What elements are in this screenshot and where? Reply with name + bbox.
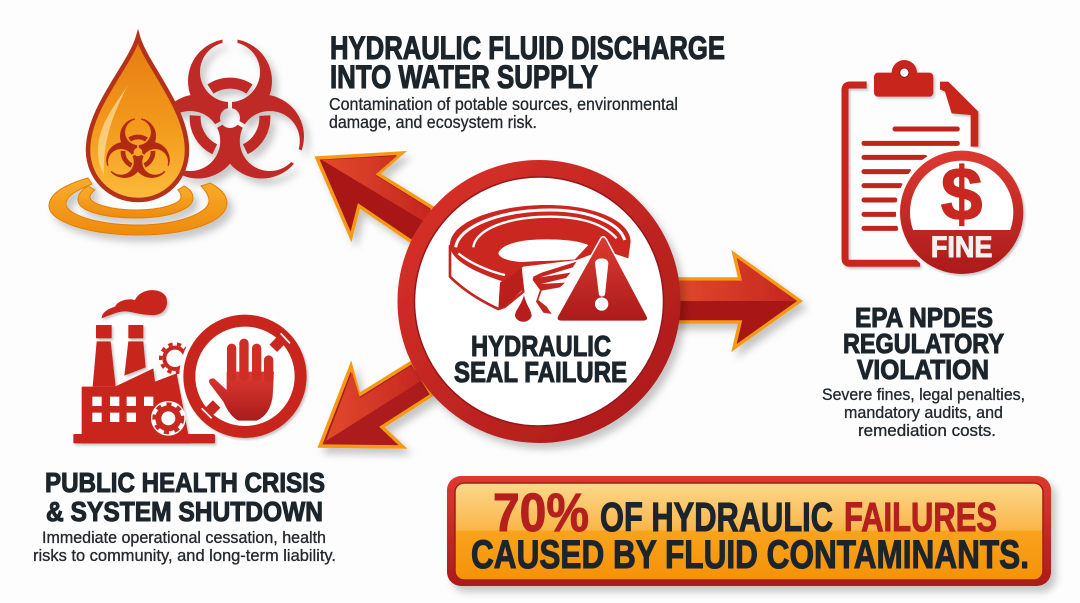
statistic text: 70% (493, 483, 589, 543)
icon: fluid drop (88, 37, 187, 200)
text block: fluid discharge (329, 30, 725, 132)
heading: INTO WATER SUPPLY (330, 59, 598, 95)
heading (843, 302, 1004, 385)
icon: clipboard with fine (845, 60, 1027, 278)
central label (454, 331, 627, 389)
arrow: to regulatory violation (670, 254, 800, 348)
text block: public health crisis (33, 467, 336, 565)
heading: & SYSTEM SHUTDOWN (46, 496, 323, 527)
callout: statistic banner (447, 476, 1051, 586)
description (822, 386, 1025, 440)
heading: HYDRAULIC FLUID DISCHARGE (330, 30, 725, 66)
description (329, 94, 678, 132)
central label: SEAL FAILURE (454, 357, 627, 389)
icon: contaminated fluid drop and biohazard (49, 28, 320, 235)
description: Severe fines, legal penalties, (822, 386, 1025, 404)
icon: fine badge (896, 147, 1027, 278)
text block: EPA violation (822, 302, 1025, 440)
icon: factory with stop hand (73, 290, 311, 443)
icon: ripples (49, 178, 227, 235)
icon: fine badge: $ (941, 152, 983, 236)
ring (406, 168, 672, 434)
heading: EPA NPDES (855, 302, 993, 333)
description: risks to community, and long-term liability. (33, 547, 336, 565)
heading: PUBLIC HEALTH CRISIS (45, 467, 325, 498)
icon: small biohazard symbol (99, 113, 177, 191)
icon: broken hydraulic seal with warning (450, 205, 647, 322)
heading (45, 467, 325, 527)
heading: VIOLATION (857, 354, 989, 385)
central label: HYDRAULIC (471, 331, 611, 363)
icon: factory (73, 290, 215, 443)
arrow: to public health crisis (320, 362, 432, 447)
arrow: to water contamination (317, 153, 433, 242)
heading (330, 30, 725, 95)
description: Contamination of potable sources, environmental (329, 94, 678, 114)
description: Immediate operational cessation, health (42, 529, 326, 547)
icon: fine badge: FINE (931, 231, 992, 264)
panel: central seal failure circle (406, 168, 672, 434)
icon: stop sign with hand (179, 311, 311, 442)
icon: gears (151, 344, 189, 436)
description: remediation costs. (858, 422, 996, 440)
statistic text: FAILURES (844, 494, 997, 540)
statistic text (471, 483, 1029, 577)
statistic text: OF HYDRAULIC (600, 494, 833, 540)
description: mandatory audits, and (844, 404, 1003, 422)
heading: REGULATORY (843, 328, 1004, 359)
description (33, 529, 336, 565)
icon: large biohazard symbol (140, 28, 320, 208)
description: damage, and ecosystem risk. (329, 112, 537, 132)
